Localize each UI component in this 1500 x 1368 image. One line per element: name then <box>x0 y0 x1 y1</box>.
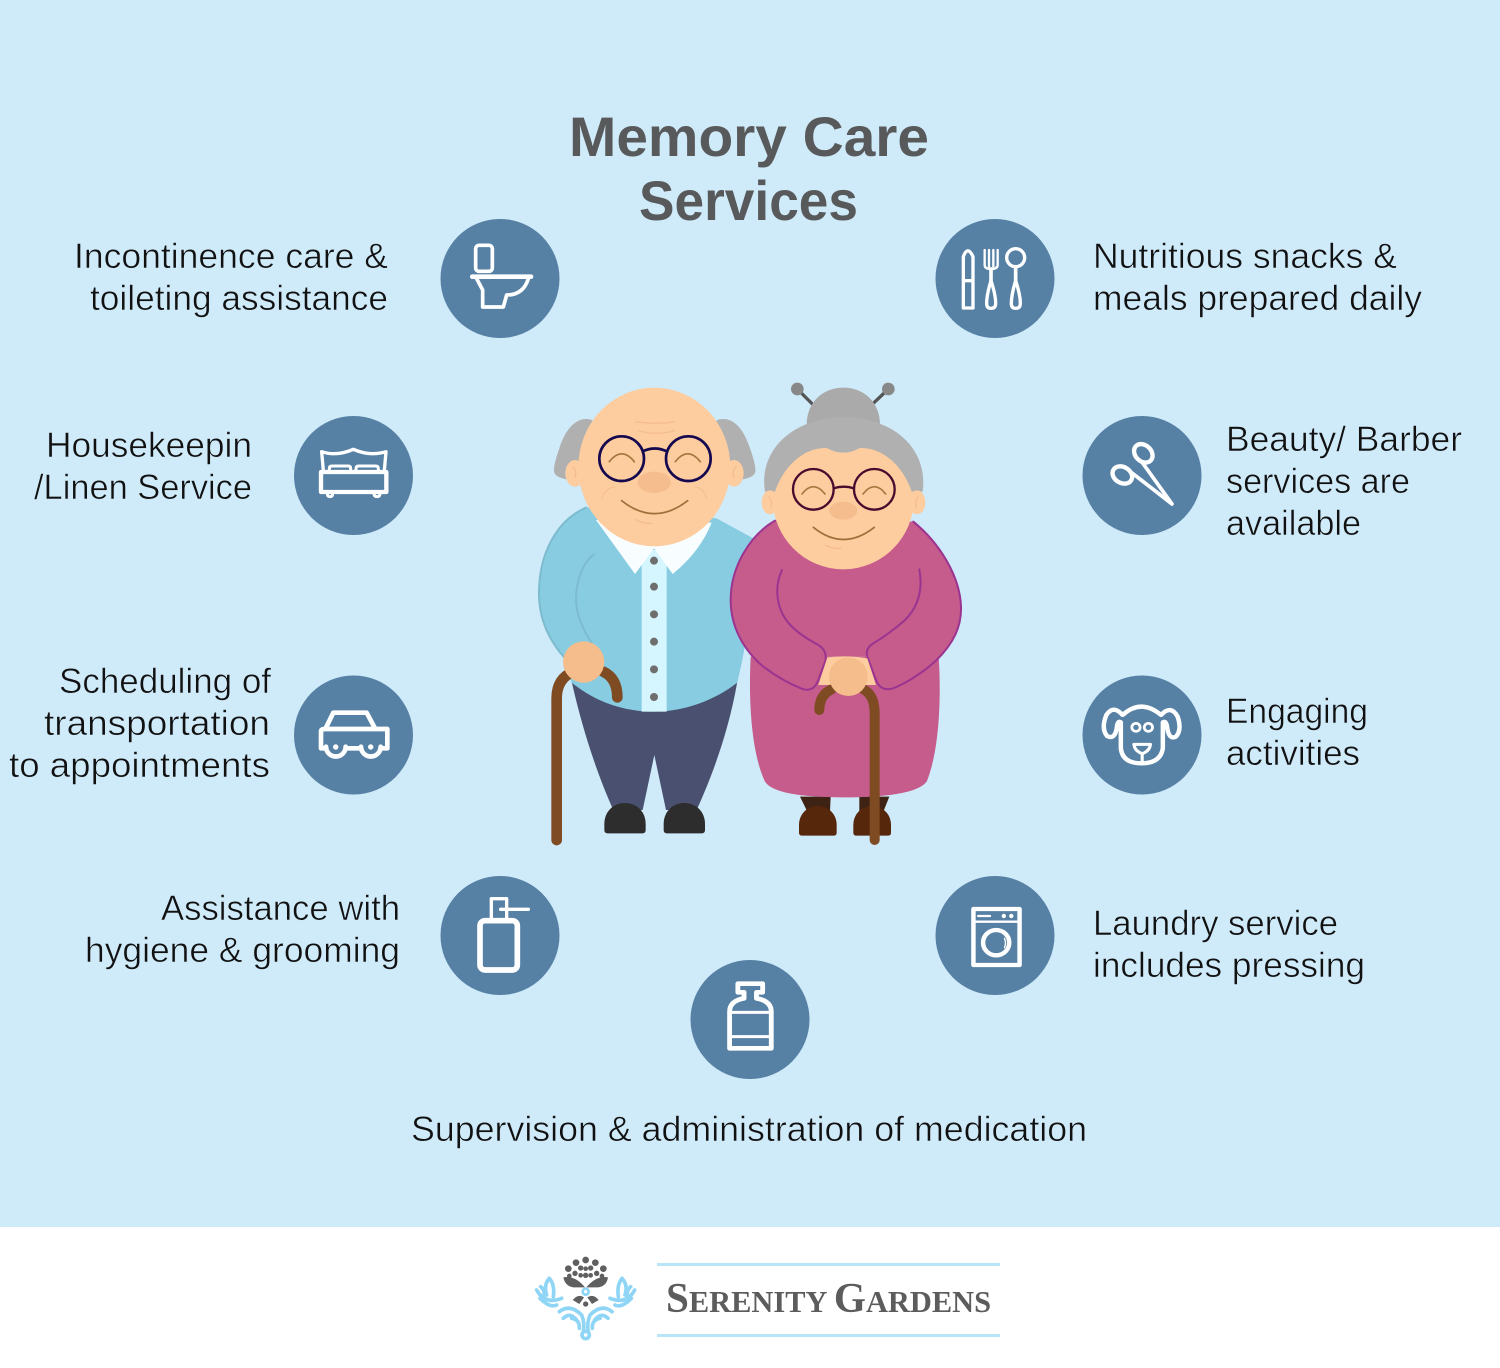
title: Memory Care <box>569 105 929 168</box>
icon: bed <box>294 416 413 535</box>
text: housekeeping: /Linen Service <box>34 468 252 507</box>
text: laundry: Laundry service <box>1093 904 1338 943</box>
text: nutritious meals: meals prepared daily <box>1093 279 1422 318</box>
text: transportation <box>9 662 271 785</box>
text: incontinence care: Incontinence care & <box>74 237 388 276</box>
icon: car <box>294 676 413 794</box>
text: incontinence care <box>74 237 388 318</box>
text: transportation: transportation <box>44 704 270 743</box>
panel: white footer <box>0 1227 1500 1368</box>
icon: washing machine <box>936 876 1054 995</box>
logo rules <box>657 1264 1000 1336</box>
text: hygiene: Assistance with <box>161 889 400 928</box>
icon: toilet <box>440 219 560 338</box>
icon: medicine bottle <box>690 960 810 1079</box>
text: engaging activities: Engaging <box>1226 692 1368 731</box>
text: laundry <box>1093 904 1365 985</box>
text: housekeeping <box>34 426 252 507</box>
text: nutritious meals <box>1093 237 1422 318</box>
title <box>569 105 929 232</box>
illustration: elderly couple <box>538 383 961 840</box>
woman <box>731 383 961 840</box>
title: Services <box>639 169 858 232</box>
icon: cutlery <box>936 219 1054 338</box>
text: transportation: Scheduling of <box>59 662 271 701</box>
text: beauty barber <box>1226 420 1462 543</box>
text: engaging activities <box>1226 692 1368 773</box>
man <box>538 388 755 840</box>
text: engaging activities: activities <box>1226 734 1360 773</box>
logo: Serenity Gardens <box>537 1257 1000 1339</box>
logo emblem <box>537 1257 635 1339</box>
text: nutritious meals: Nutritious snacks & <box>1093 237 1397 276</box>
text: beauty barber: available <box>1226 504 1361 543</box>
text: beauty barber: services are <box>1226 462 1410 501</box>
text: hygiene <box>85 889 400 970</box>
text: beauty barber: Beauty/ Barber <box>1226 420 1462 459</box>
logo wordmark: SERENITY GARDENS <box>666 1276 991 1322</box>
icon: spray bottle <box>440 876 560 995</box>
text: housekeeping: Housekeepin <box>46 426 252 465</box>
text: transportation: to appointments <box>9 746 270 785</box>
text: incontinence care: toileting assistance <box>90 279 388 318</box>
icon: dog <box>1082 676 1202 794</box>
text: medication: Supervision & administration of medication <box>411 1110 1087 1149</box>
text: laundry: includes pressing <box>1093 946 1365 985</box>
text: hygiene: hygiene & grooming <box>85 931 400 970</box>
icon: scissors <box>1082 416 1202 535</box>
